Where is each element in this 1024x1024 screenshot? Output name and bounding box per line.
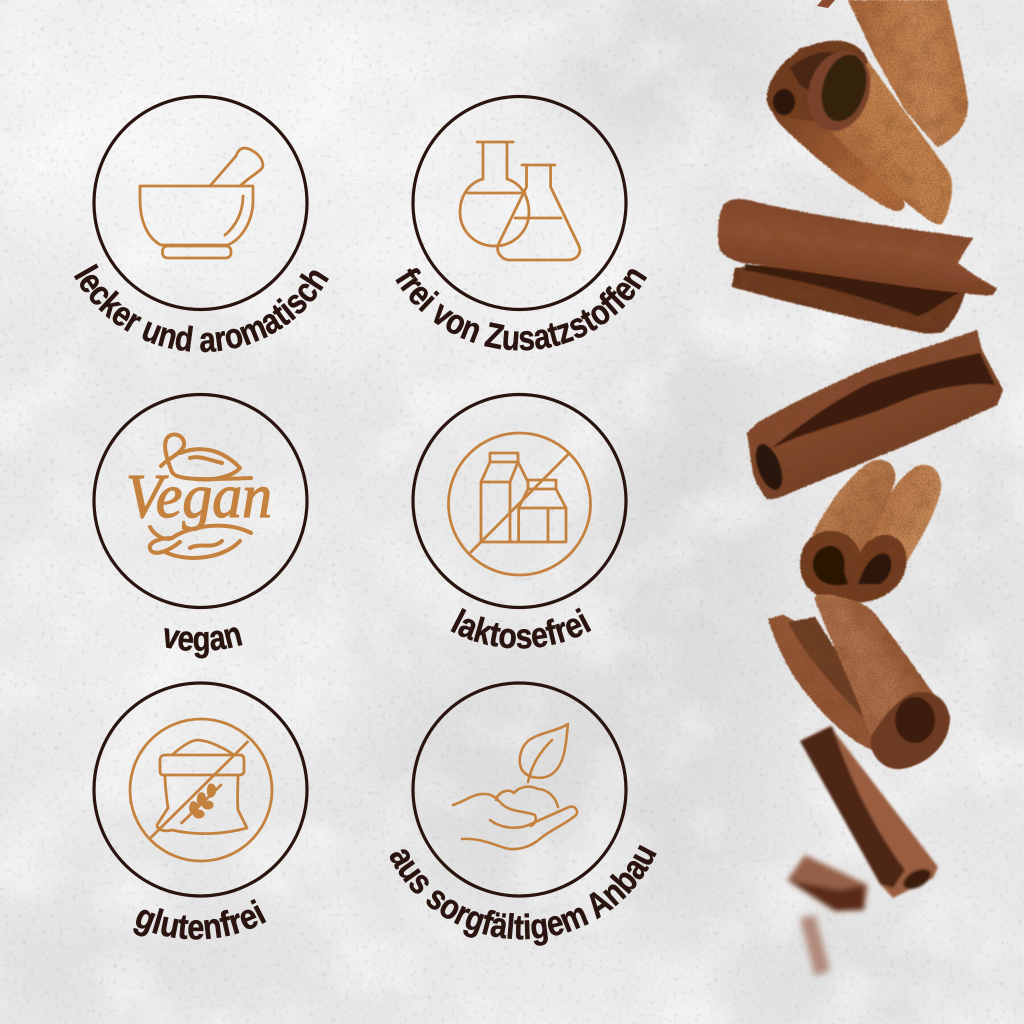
stick: sixth roll with trough [768, 594, 950, 769]
label: lecker und aromatisch [74, 264, 329, 352]
stick: blurred far fragment [800, 915, 830, 976]
panel: vegan [92, 392, 309, 658]
stick: top fragment [817, 0, 835, 8]
ring [94, 96, 307, 310]
icon: vegan lettering with leaves [126, 435, 272, 558]
upper roll [718, 199, 997, 295]
panel: aus sorgfaeltigem Anbau [390, 681, 657, 946]
stick: blurred small fragment [787, 855, 868, 911]
panel: frei von Zusatzstoffen [395, 94, 648, 351]
panel: lecker und aromatisch [74, 94, 329, 352]
ring [413, 96, 626, 310]
label: vegan [164, 627, 242, 658]
dark inner gap [745, 264, 960, 316]
stick: sixth roll opening [871, 692, 949, 769]
ring [94, 683, 307, 896]
dark channel [772, 353, 995, 448]
stick: top back roll [848, 0, 968, 147]
cinnamon sticks column [718, 0, 1003, 976]
stick: blurred lower roll [800, 726, 938, 898]
stick: third roll [718, 199, 997, 333]
ring [94, 394, 307, 608]
label: frei von Zusatzstoffen [395, 268, 648, 351]
stick: rolled pair upper [767, 41, 952, 224]
stick: heart openings [813, 546, 891, 585]
label: aus sorgfältigem Anbau [390, 844, 657, 946]
ring [413, 394, 626, 608]
stick: heart-shaped pair [800, 460, 941, 603]
ring [413, 683, 626, 896]
icon: crossed-out milk cartons [448, 433, 590, 575]
panel: laktosefrei [411, 392, 628, 649]
panel: glutenfrei [92, 681, 309, 940]
icon: hand holding seedling [453, 724, 577, 849]
lower lip [732, 262, 965, 333]
icon: laboratory flasks [460, 142, 580, 260]
label: laktosefrei [450, 608, 592, 649]
icon: mortar and pestle [140, 148, 263, 258]
icon: vegan lettering with leaves: Vegan [126, 463, 272, 531]
stick: upper pair openings [773, 43, 880, 139]
stick: fourth open roll [747, 330, 1003, 499]
label: glutenfrei [133, 898, 266, 940]
stick: fourth roll opening [750, 441, 788, 493]
icon: crossed-out flour sack [130, 719, 272, 861]
